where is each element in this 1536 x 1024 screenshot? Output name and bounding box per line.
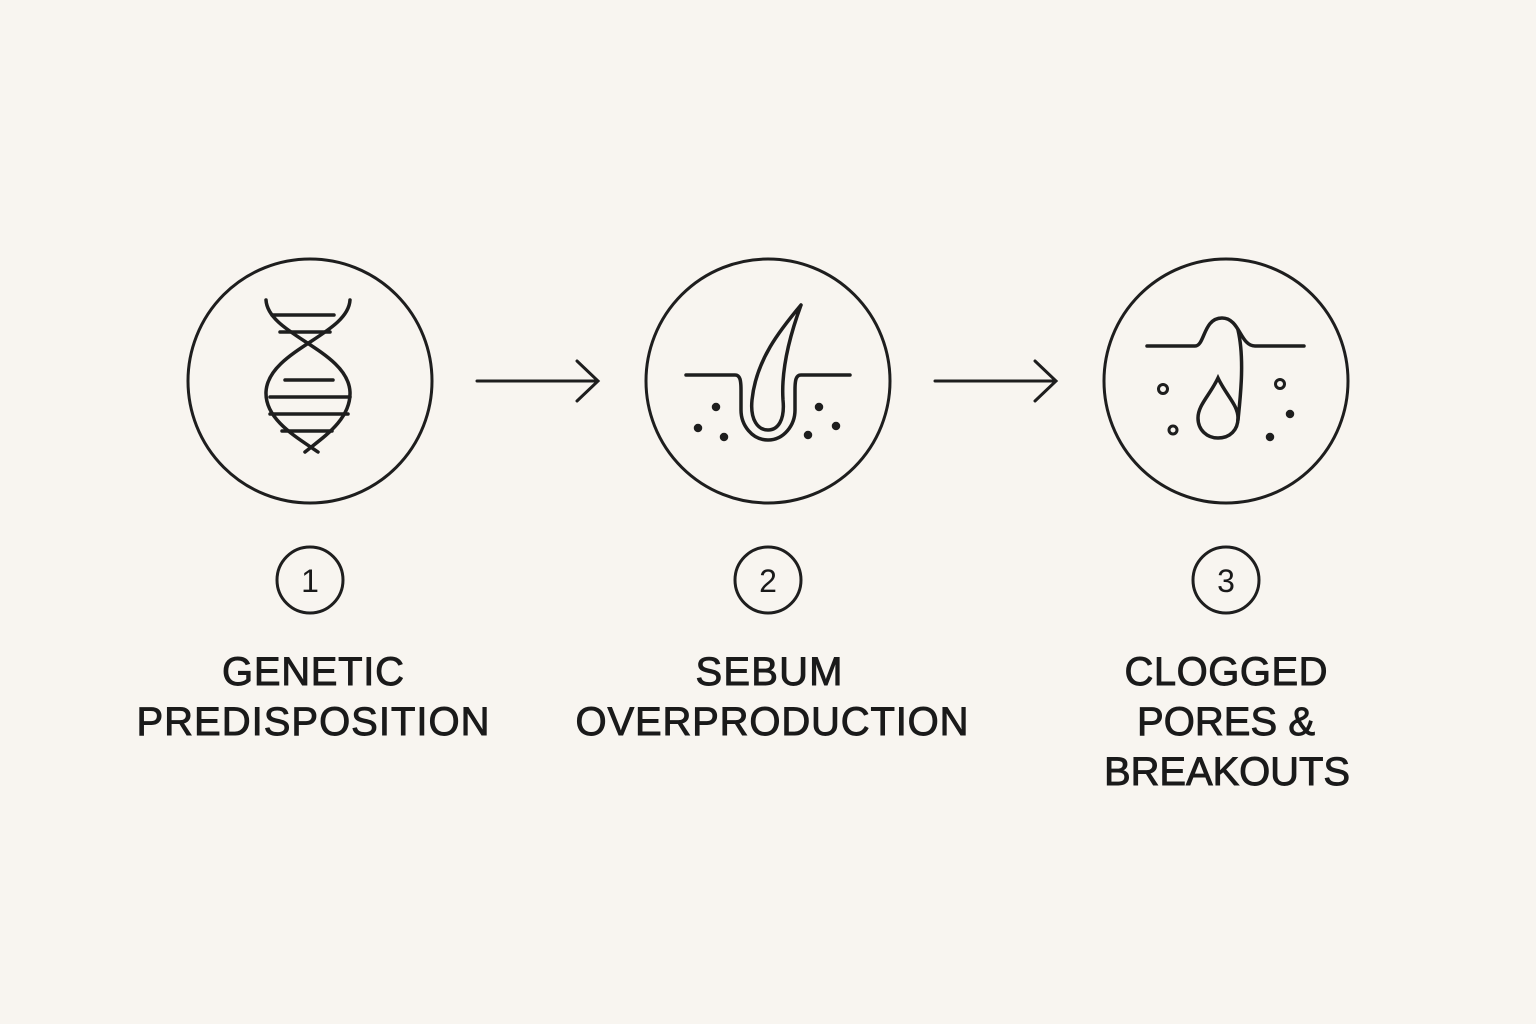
arrow 1 [477,361,598,401]
label 3: CLOGGED [1124,650,1328,694]
label 2: SEBUM [696,650,842,694]
label 1: PREDISPOSITION [136,700,490,744]
label 2: OVERPRODUCTION [576,700,968,744]
icon circle 3 [1104,259,1348,503]
arrow 2 [935,361,1056,401]
step 2: sebum overproduction [576,259,968,744]
label 1 [136,650,490,744]
number badge 2: 2 [759,563,777,599]
label 1: GENETIC [222,650,404,694]
icon circle 1 [188,259,432,503]
icon: clogged pore with drop [1147,318,1304,440]
number badge 3: 3 [1217,563,1235,599]
step 3: clogged pores [1104,259,1350,794]
number badge 1: 1 [301,563,319,599]
label 3: PORES & [1137,700,1315,744]
icon: hair follicle [686,305,850,440]
label 2 [576,650,968,744]
number badge 2 [735,547,801,613]
icon circle 2 [646,259,890,503]
label 3: BREAKOUTS [1104,750,1350,794]
number badge 3 [1193,547,1259,613]
number badge 1 [277,547,343,613]
step 1: genetic predisposition [136,259,490,744]
label 3 [1104,650,1350,794]
icon: DNA helix [266,300,350,452]
